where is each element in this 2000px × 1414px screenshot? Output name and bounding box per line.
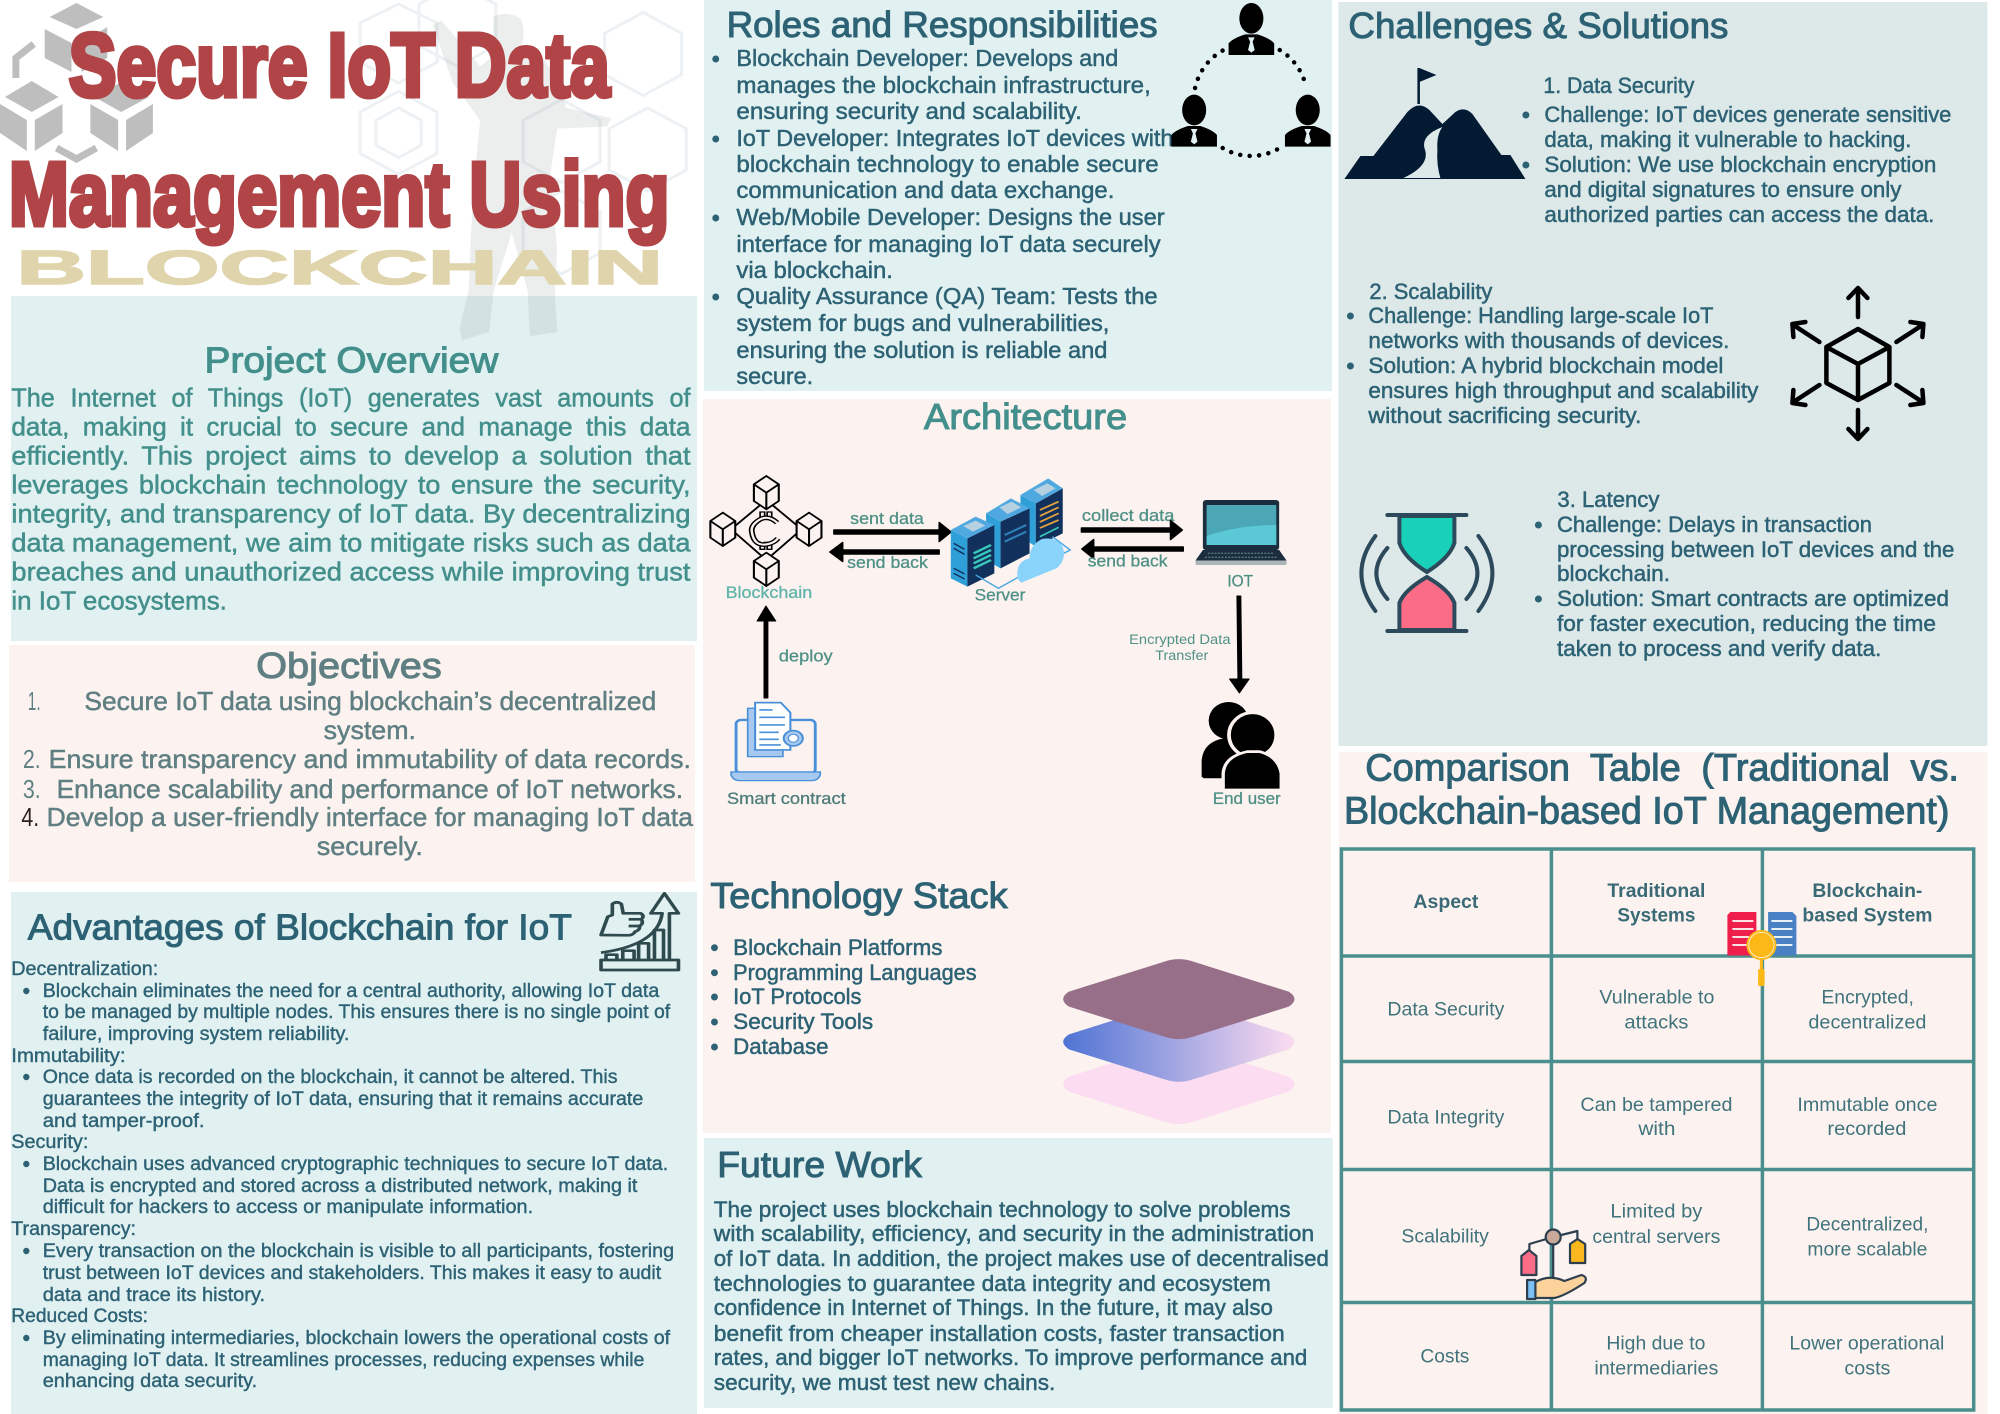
text block: latency: processing between IoT devices and the: [1557, 537, 1954, 562]
text block: latency: taken to process and verify data.: [1557, 636, 1881, 661]
table row: data integrity: Immutable once: [1797, 1094, 1937, 1116]
heading: advantages: Advantages of Blockchain for IoT: [28, 907, 572, 948]
table header row: Blockchain-: [1812, 880, 1922, 902]
table row: costs: High due to: [1606, 1332, 1706, 1354]
table row: data security: [1387, 986, 1926, 1034]
label: IOT: IOT: [1227, 572, 1253, 591]
arrow: encrypted data transfer: Encrypted Data: [1129, 631, 1231, 647]
table row: scalability: more scalable: [1807, 1238, 1927, 1260]
icon: hourglass: [1361, 515, 1492, 631]
text block: overview body: leverages blockchain technology to ensure the security,: [11, 471, 690, 500]
text block: advantages list: Once data is recorded on the blockchain, it cannot be altered. This: [43, 1066, 618, 1088]
text block: latency: for faster execution, reducing the time: [1557, 611, 1936, 636]
panel: roles and responsibilities: [704, 0, 1332, 391]
icon: cube with arrows: [1792, 288, 1923, 439]
text block: roles list: ensuring the solution is reliable and: [736, 337, 1107, 363]
text block: roles list: interface for managing IoT data securely: [736, 231, 1161, 257]
title: [9, 16, 670, 295]
text block: future work body: of IoT data. In addition, the project makes use of decentralised: [714, 1246, 1329, 1271]
text block: overview body: The Internet of Things (IoT) generates vast amounts of: [11, 384, 691, 413]
table grid: [1341, 849, 1974, 1410]
panel: project overview: [11, 296, 697, 641]
icon: grey blockchain cubes: [0, 3, 153, 159]
text block: roles list: Web/Mobile Developer: Designs the user: [736, 204, 1165, 230]
text block: stack list: [711, 935, 977, 1059]
text block: advantages list: Decentralization:: [11, 958, 158, 980]
text block: future work body: [713, 1197, 1329, 1395]
text block: objectives list: system.: [324, 717, 416, 745]
label: smart contract: Smart contract: [727, 789, 846, 808]
panel: challenges and solutions: [1338, 2, 1987, 746]
text block: latency: Solution: Smart contracts are optimized: [1557, 586, 1949, 611]
label: blockchain: Blockchain: [726, 583, 812, 602]
table row: data integrity: Data Integrity: [1387, 1106, 1505, 1128]
panel: comparison table: [1338, 748, 1987, 1414]
text block: advantages list: data and trace its history.: [43, 1284, 265, 1306]
table row: data security: Encrypted,: [1821, 986, 1914, 1008]
icon: end users: [1202, 702, 1281, 790]
panel: advantages of blockchain for IoT: [11, 892, 697, 1414]
text block: future work body: with scalability, efficiency, and security in the administration: [713, 1221, 1314, 1246]
text block: roles list: Blockchain Developer: Develops and: [736, 45, 1118, 71]
table header row: based System: [1802, 904, 1932, 926]
text block: scalability: networks with thousands of devices.: [1368, 328, 1729, 353]
text block: advantages list: enhancing data security.: [43, 1370, 257, 1392]
text block: scalability: [1347, 279, 1758, 428]
text block: objectives list: 2.: [23, 746, 41, 774]
text block: scalability: 2. Scalability: [1369, 279, 1492, 304]
text block: overview body: in IoT ecosystems.: [11, 587, 227, 616]
text block: advantages list: Reduced Costs:: [11, 1305, 148, 1327]
text block: data security: and digital signatures to ensure only: [1544, 177, 1901, 202]
text block: roles list: Quality Assurance (QA) Team: Tests the: [736, 283, 1158, 309]
table row: data security: decentralized: [1808, 1012, 1926, 1034]
table row: costs: intermediaries: [1594, 1358, 1719, 1380]
icon: thumbs up growth chart: [601, 893, 678, 970]
text block: stack list: Database: [733, 1034, 829, 1059]
text block: objectives list: 4.: [21, 804, 39, 832]
heading: comparison table: Blockchain-based IoT Management): [1344, 790, 1949, 832]
text block: future work body: confidence in Internet of Things. In the future, it may also: [714, 1295, 1273, 1320]
text block: stack list: Blockchain Platforms: [733, 935, 943, 960]
text block: stack list: IoT Protocols: [733, 984, 862, 1009]
text block: roles list: [712, 45, 1173, 389]
text block: future work body: security, we must test new chains.: [714, 1370, 1055, 1395]
table row: scalability: Scalability: [1401, 1226, 1489, 1248]
panel: architecture and technology stack background: [703, 399, 1331, 1133]
arrow: sent data: sent data: [850, 509, 925, 528]
icon: mountain with flag: [1344, 68, 1525, 179]
icon: hand with tags scale: [1521, 1230, 1586, 1299]
text block: future work body: technologies to guarantee data integrity and ecosystem: [714, 1271, 1271, 1296]
text block: objectives list: Develop a user-friendly interface for managing IoT data: [47, 804, 694, 832]
text block: advantages list: difficult for hackers to access or manipulate information.: [43, 1196, 533, 1218]
heading: objectives: Objectives: [256, 646, 442, 686]
text block: advantages list: Transparency:: [11, 1218, 136, 1240]
text block: data security: Solution: We use blockchain encryption: [1544, 152, 1936, 177]
label: end user: End user: [1213, 789, 1281, 808]
heading: comparison table: Comparison Table (Traditional vs.: [1365, 748, 1959, 790]
text block: latency: Challenge: Delays in transaction: [1557, 512, 1872, 537]
text block: advantages list: Blockchain eliminates the need for a central authority, allowing IoT data: [43, 980, 659, 1002]
icon: documents with magnifier: [1727, 912, 1796, 986]
text block: stack list: Security Tools: [733, 1009, 873, 1034]
icon: blockchain network: [710, 476, 821, 586]
heading: project overview: Project Overview: [205, 340, 498, 381]
text block: advantages list: Immutability:: [11, 1045, 125, 1067]
arrow: send back to server: send back: [1088, 552, 1168, 571]
text block: scalability: Solution: A hybrid blockchain model: [1368, 353, 1723, 378]
icon: team circle: [1171, 3, 1331, 156]
title: BLOCKCHAIN: [17, 242, 663, 295]
arrow: collect data: collect data: [1082, 506, 1175, 525]
table header row: [1413, 880, 1932, 926]
table row: data integrity: with: [1637, 1118, 1675, 1140]
text block: scalability: Challenge: Handling large-scale IoT: [1368, 303, 1713, 328]
text block: future work body: The project uses blockchain technology to solve problems: [714, 1197, 1291, 1222]
text block: roles list: communication and data exchange.: [736, 177, 1114, 203]
text block: objectives list: Enhance scalability and performance of IoT networks.: [57, 776, 683, 804]
text block: overview body: efficiently. This project aims to develop a solution that: [11, 442, 690, 471]
text block: overview body: breaches and unauthorized access while improving trust: [11, 558, 690, 587]
heading: future work: Future Work: [717, 1145, 922, 1185]
text block: advantages list: [11, 958, 674, 1392]
text block: data security: [1522, 73, 1951, 227]
text block: roles list: secure.: [736, 363, 813, 389]
table row: costs: Costs: [1420, 1346, 1470, 1368]
table row: data integrity: Can be tampered: [1580, 1094, 1732, 1116]
image: person silhouette with network: [433, 14, 611, 340]
text block: advantages list: Security:: [11, 1131, 88, 1153]
title: Secure IoT Data: [69, 16, 611, 116]
text block: scalability: ensures high throughput and scalability: [1368, 378, 1758, 403]
heading: roles: Roles and Responsibilities: [727, 5, 1158, 45]
text block: future work body: rates, and bigger IoT networks. To improve performance and: [714, 1345, 1307, 1370]
label: server: Server: [975, 586, 1026, 605]
text block: roles list: IoT Developer: Integrates IoT devices with: [736, 125, 1173, 151]
arrow: send back to blockchain: send back: [847, 553, 928, 572]
text block: objectives list: 3.: [23, 776, 41, 804]
text block: roles list: via blockchain.: [736, 257, 893, 283]
text block: latency: [1535, 487, 1954, 661]
panel: future work: [704, 1138, 1333, 1408]
text block: advantages list: guarantees the integrity of IoT data, ensuring that it remains accurate: [43, 1088, 643, 1110]
arrow: encrypted data transfer: Transfer: [1155, 647, 1209, 663]
arrow: send back to blockchain: [830, 542, 939, 572]
text block: objectives list: Secure IoT data using blockchain’s decentralized: [84, 688, 656, 716]
text block: data security: authorized parties can access the data.: [1544, 202, 1934, 227]
table header row: Aspect: [1413, 891, 1479, 913]
text block: objectives list: Ensure transparency and immutability of data records.: [49, 746, 691, 774]
text block: overview body: [11, 384, 691, 616]
text block: objectives list: 1.: [28, 688, 41, 716]
table row: data security: attacks: [1624, 1012, 1689, 1034]
icon: server cluster: [951, 478, 1070, 588]
table row: scalability: [1401, 1200, 1928, 1260]
icon: layered stack: [1063, 959, 1294, 1124]
text block: advantages list: Blockchain uses advanced cryptographic techniques to secure IoT data.: [43, 1153, 668, 1175]
text block: objectives list: securely.: [317, 833, 423, 861]
arrow: encrypted data transfer: [1129, 596, 1249, 693]
title: Management Using: [9, 145, 670, 245]
table row: scalability: Decentralized,: [1806, 1214, 1928, 1236]
text block: roles list: manages the blockchain infrastructure,: [736, 72, 1151, 98]
table row: data integrity: recorded: [1827, 1118, 1906, 1140]
table row: data integrity: [1387, 1094, 1937, 1140]
text block: data security: Challenge: IoT devices generate sensitive: [1544, 102, 1951, 127]
text block: advantages list: Data is encrypted and stored across a distributed network, making it: [43, 1175, 638, 1197]
text block: advantages list: to be managed by multiple nodes. This ensures there is no single point of: [43, 1001, 671, 1023]
icon: smart contract laptop: [731, 703, 820, 781]
panel: technology stack: [710, 876, 1294, 1124]
arrow: send back to server: [1082, 540, 1183, 571]
text block: data security: 1. Data Security: [1543, 73, 1694, 98]
text block: stack list: Programming Languages: [733, 960, 977, 985]
text block: advantages list: and tamper-proof.: [43, 1110, 205, 1132]
text block: overview body: data management, we aim to mitigate risks such as data: [11, 529, 691, 558]
text block: roles list: blockchain technology to enable secure: [736, 151, 1159, 177]
text block: overview body: data, making it crucial to secure and manage this data: [11, 413, 691, 442]
arrow: sent data: [834, 509, 951, 542]
arrow: collect data: [1081, 506, 1182, 540]
text block: advantages list: managing IoT data. It streamlines processes, reducing expenses while: [43, 1349, 644, 1371]
table row: costs: [1420, 1332, 1944, 1380]
heading: comparison table: [1344, 748, 1959, 832]
table row: data security: Data Security: [1387, 998, 1505, 1020]
text block: advantages list: failure, improving system reliability.: [43, 1023, 349, 1045]
text block: advantages list: By eliminating intermediaries, blockchain lowers the operational costs of: [43, 1327, 671, 1349]
table row: data security: Vulnerable to: [1599, 986, 1715, 1008]
heading: architecture: Architecture: [924, 397, 1127, 437]
text block: latency: 3. Latency: [1557, 487, 1659, 512]
text block: overview body: integrity, and transparency of IoT data. By decentralizing: [11, 500, 690, 529]
text block: latency: blockchain.: [1557, 561, 1670, 586]
arrow: deploy: [757, 606, 833, 698]
text block: future work body: benefit from cheaper installation costs, faster transaction: [714, 1321, 1285, 1346]
table row: scalability: Limited by: [1610, 1200, 1703, 1222]
arrow: deploy: deploy: [779, 647, 833, 666]
table row: scalability: central servers: [1592, 1226, 1721, 1248]
diagram: architecture: [710, 397, 1287, 808]
text block: data security: data, making it vulnerable to hacking.: [1544, 127, 1911, 152]
text block: scalability: without sacrificing security.: [1367, 403, 1641, 428]
text block: advantages list: trust between IoT devices and stakeholders. This makes it easy to audit: [43, 1262, 662, 1284]
panel: objectives: [9, 645, 695, 882]
table header row: Systems: [1617, 904, 1696, 926]
table row: costs: costs: [1844, 1358, 1891, 1380]
heading: technology stack: Technology Stack: [710, 876, 1008, 916]
text block: advantages list: Every transaction on the blockchain is visible to all participants, fostering: [43, 1240, 674, 1262]
text block: objectives list: [21, 688, 694, 861]
icon: laptop: [1195, 500, 1287, 565]
table row: costs: Lower operational: [1789, 1332, 1944, 1354]
heading: challenges: Challenges & Solutions: [1348, 5, 1728, 46]
text block: roles list: system for bugs and vulnerabilities,: [736, 310, 1109, 336]
table header row: Traditional: [1607, 880, 1705, 902]
text block: roles list: ensuring security and scalability.: [736, 98, 1082, 124]
